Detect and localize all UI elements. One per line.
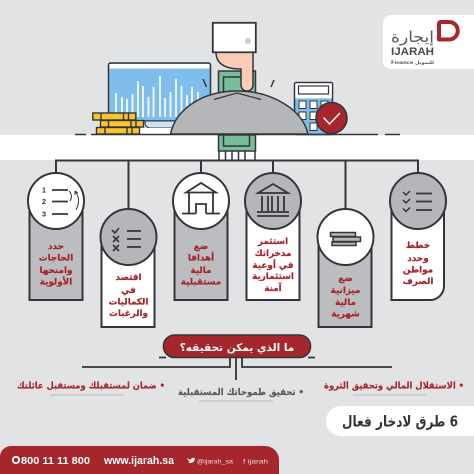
card 6 text: مواطن [403,266,433,276]
card 4 text: في أوعية [252,259,294,271]
card 5: monthly budget [318,209,374,327]
card 6 text: الصرف [403,277,433,287]
card 3 text: ضع [194,242,208,252]
card 1 text: وامنحها [40,266,72,276]
icon: check and cross list [100,209,156,265]
card 2 text: في [121,286,136,296]
card 5 text: شهرية [331,310,360,320]
card 1 text: الحاجات [39,254,73,264]
achievement: financial independence: • الاستقلال المالي وتحقيق الثروة [324,382,464,392]
card 3 text: مالية [191,266,211,276]
icon: numbered list: 1 [42,186,46,194]
icon: stacked banknotes [318,209,374,265]
main title [326,406,474,436]
icon: house [173,173,229,229]
illustration: calculator [294,82,332,134]
illustration: gold coins [93,113,144,134]
achievement: future ambitions: • تحقيق طموحاتك المستقبلية [178,388,304,398]
icon: phone [13,457,19,463]
card 4 text: استثمارية [252,272,294,282]
card 3: financial goals [173,173,229,300]
card 2: cut luxuries [100,209,156,327]
illustration: monitor with chart [108,63,210,134]
icon: twitter [187,458,195,463]
card 4 text: آمنة [264,282,283,294]
icon: checklist [390,173,446,229]
card 2 text: الكماليات [109,298,148,308]
card 4: safe investment [245,173,301,300]
footer phone: 800 11 11 800 [21,456,90,467]
card 6: plan spending [390,173,446,300]
connector tree [56,160,418,210]
icon: numbered list: 3 [42,210,46,218]
heading connectors [82,358,392,380]
illustration: banknote below dome [218,135,256,160]
footer facebook: f ijarah [243,458,268,466]
card 4 text: مدخراتك [255,249,291,259]
card 5 text: ضع [338,274,353,284]
achievements heading pill [164,335,310,358]
icon: bank [245,173,301,229]
card 6 text: خطط [406,241,430,251]
card 1 text: حدد [48,242,64,252]
main title: 6 طرق لادخار فعال [342,412,458,430]
logo latin name: IJARAH [391,46,434,58]
card 4 text: استثمر [257,237,288,247]
card 3 text: مستقبلية [181,278,221,288]
achievement: family future: • ضمان لمستقبلك ومستقبل عائلتك [17,382,165,392]
icon: logo mark [439,22,458,40]
card 6 text: وحدد [407,254,429,264]
logo arabic name: إيجارة [391,28,434,46]
icon: check badge [316,102,347,134]
card 2 text: والرغبات [109,309,148,319]
footer twitter handle: @ijarah_sa [197,460,234,466]
illustration: serving dome [170,80,308,134]
card 5 text: مالية [335,298,356,308]
card 1: priorities [28,173,84,300]
card 1 text: الأولوية [40,276,72,288]
footer bar [0,446,279,474]
ground line [75,134,400,136]
icon: numbered list: 2 [42,197,46,206]
logo panel [383,15,474,69]
achievements heading pill: ما الذي يمكن تحقيقه؟ [180,342,294,354]
illustration: hand holding banknote [213,23,256,98]
footer website: www.ijarah.sa [103,455,175,467]
icon: numbered list [28,173,84,229]
card 3 text: أهدافا [188,252,214,264]
logo tagline: Finance للتمويل [391,60,434,66]
card 2 text: اقتصد [115,273,142,283]
card 5 text: ميزانية [331,286,360,296]
